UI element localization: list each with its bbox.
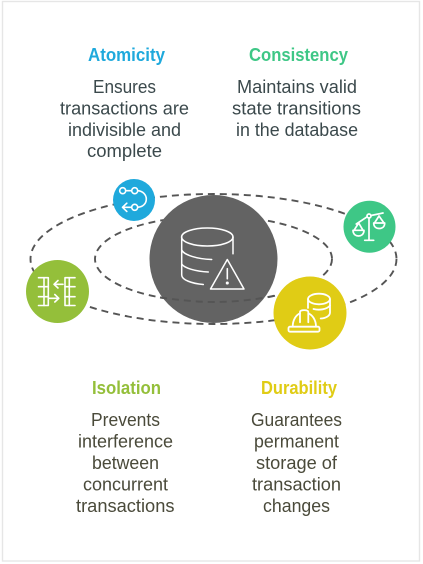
icon: isolation tables [26, 260, 89, 323]
text block: Isolation description: between [92, 453, 159, 473]
text block: Atomicity description: complete [87, 141, 162, 161]
text block: Isolation description [76, 410, 174, 516]
icon: consistency scales [344, 201, 396, 253]
text block: Consistency description: in the database [236, 120, 358, 140]
heading: Durability: Durability [261, 377, 338, 398]
icon: atomicity node [113, 179, 155, 221]
text block: Consistency description: state transitions [232, 98, 361, 118]
central circle: database warning [150, 195, 278, 323]
text block: Consistency description [232, 77, 361, 140]
text block: Consistency description: Maintains valid [237, 77, 357, 97]
text block: Isolation description: interference [78, 432, 173, 452]
text block: Atomicity description: Ensures [93, 77, 156, 97]
heading: Consistency: Consistency [249, 44, 349, 65]
text block: Atomicity description: indivisible and [68, 120, 181, 140]
icon: durability database and helmet [274, 276, 346, 350]
text block: Durability description: Guarantees [251, 410, 342, 430]
text block: Durability description: storage of [256, 453, 338, 473]
heading: Atomicity: Atomicity [88, 44, 166, 65]
text block: Atomicity description [60, 77, 189, 161]
icon: database [182, 228, 233, 284]
heading: Isolation: Isolation [92, 377, 161, 398]
icon: warning triangle [210, 260, 244, 289]
text block: Isolation description: Prevents [91, 410, 160, 430]
text block: Durability description: transaction [252, 474, 341, 494]
text block: Atomicity description: transactions are [60, 98, 189, 118]
text block: Isolation description: transactions [76, 496, 174, 516]
text block: Durability description [251, 410, 342, 516]
inner orbit front arc [160, 296, 275, 302]
text block: Durability description: permanent [254, 432, 339, 452]
text block: Durability description: changes [263, 496, 330, 516]
orbit paths [30, 194, 396, 324]
text block: Isolation description: concurrent [83, 474, 168, 494]
